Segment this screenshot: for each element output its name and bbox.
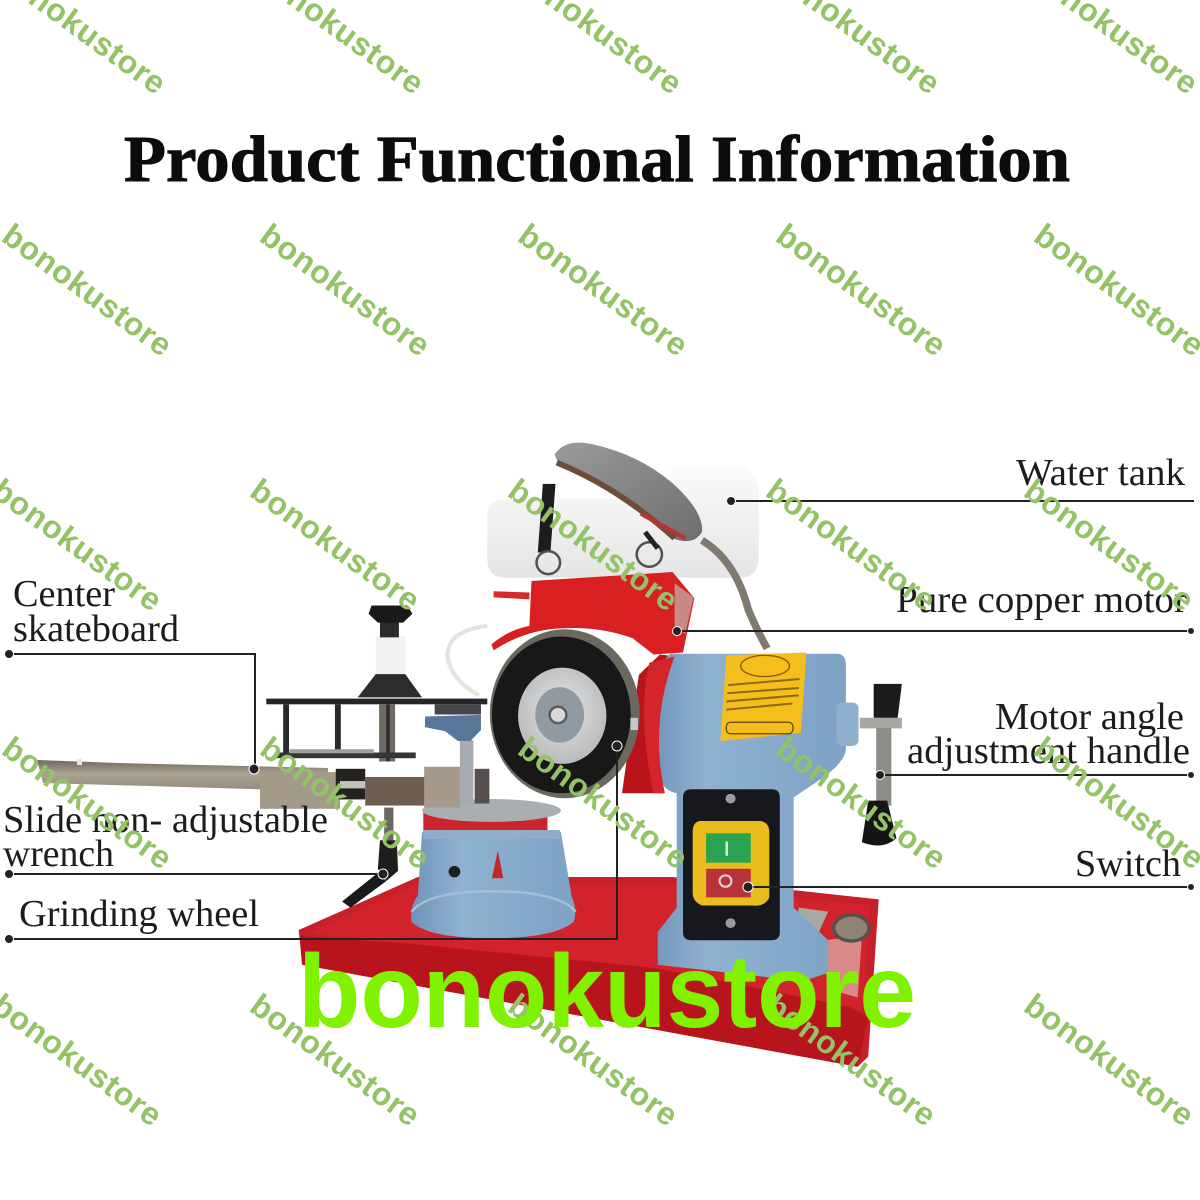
switch panel (683, 789, 780, 940)
product photo: grinding machine (260, 443, 902, 1067)
label: Water tank: Water tank (1016, 452, 1185, 494)
watermark pattern: bonokustore (254, 730, 437, 876)
watermark pattern: bonokustore (760, 987, 943, 1133)
watermark pattern: bonokustore (512, 217, 695, 363)
label: Pure copper motor (672, 579, 1194, 636)
label: Water tank (726, 452, 1194, 506)
watermark pattern: bonokustore (1018, 472, 1200, 618)
watermark pattern: bonokustore (1018, 987, 1200, 1133)
label: Motor angle adjustment handle: Motor angle (995, 696, 1184, 738)
label: Slide non-adjustable wrench: Slide non- adjustable (3, 799, 328, 841)
watermark pattern: bonokustore (770, 730, 953, 876)
watermark pattern: bonokustore (512, 730, 695, 876)
label: Grinding wheel: Grinding wheel (19, 893, 259, 935)
label: Pure copper motor: Pure copper motor (896, 579, 1187, 621)
watermark pattern: bonokustore (0, 217, 179, 363)
tray (299, 877, 879, 1067)
large brand watermark: bonokustore (298, 934, 916, 1050)
grinding wheel (490, 629, 640, 798)
label: Center skateboard: Center (13, 573, 115, 615)
center arm assembly (260, 606, 489, 908)
label: Slide non-adjustable wrench (3, 799, 388, 879)
label: Slide non-adjustable wrench: wrench (3, 833, 114, 875)
motor bracket (491, 572, 694, 793)
watermark pattern: bonokustore (502, 987, 685, 1133)
strap and rings (537, 484, 662, 574)
label: Switch: Switch (1075, 843, 1181, 885)
watermark pattern: bonokustore (244, 472, 427, 618)
watermark pattern: bonokustore (760, 472, 943, 618)
label: Center skateboard: skateboard (13, 608, 179, 650)
watermark pattern: bonokustore (502, 472, 685, 618)
watermark pattern: bonokustore (770, 217, 953, 363)
title: Product Functional Information (124, 123, 1070, 196)
label: Grinding wheel (4, 741, 622, 944)
motor housing (644, 654, 859, 981)
label: Motor angle adjustment handle: adjustment handle (907, 730, 1190, 772)
watermark pattern: bonokustore (254, 217, 437, 363)
label: Center skateboard (4, 573, 259, 774)
water tank (487, 465, 759, 578)
label: Motor angle adjustment handle (876, 696, 1194, 780)
watermark pattern: bonokustore (244, 987, 427, 1133)
arm slide (37, 759, 328, 800)
yellow nameplate (720, 652, 806, 741)
lamp (555, 443, 767, 648)
rotating base (411, 799, 576, 938)
label: Switch (743, 843, 1194, 892)
watermark pattern: bonokustore (0, 730, 179, 876)
right adjustment handle (860, 684, 902, 846)
